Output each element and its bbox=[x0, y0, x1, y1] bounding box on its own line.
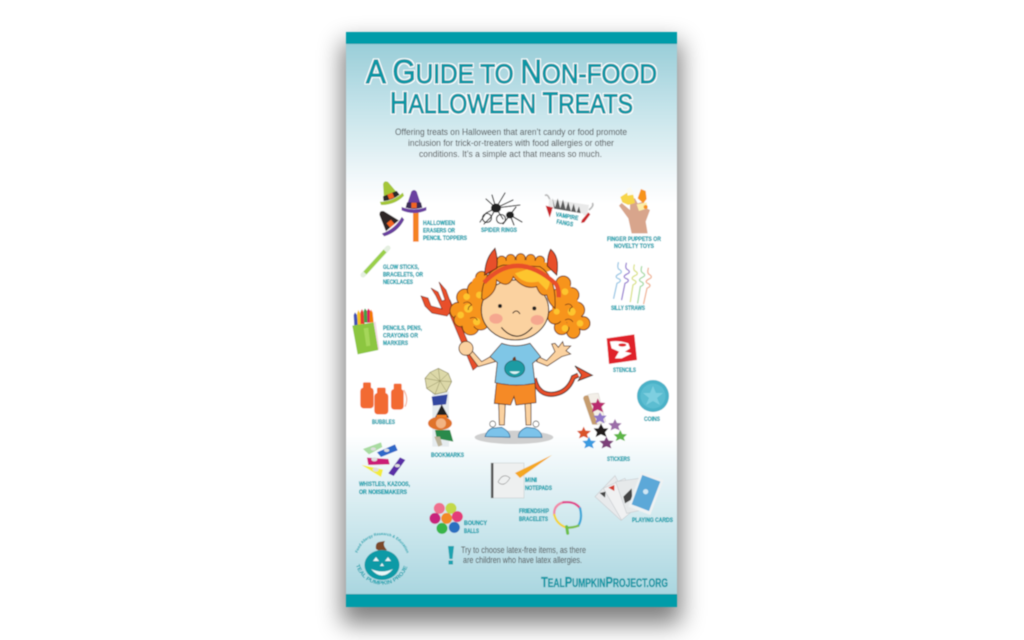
label: glow sticks: BRACELETS, OR bbox=[383, 272, 423, 278]
ground shadow bbox=[475, 431, 553, 444]
title bbox=[366, 53, 657, 120]
label: stickers: STICKERS bbox=[607, 456, 630, 463]
logo: teal pumpkin project bbox=[354, 532, 409, 586]
legs bbox=[499, 403, 505, 425]
intro text bbox=[395, 127, 627, 159]
item: mini notepads bbox=[491, 455, 552, 498]
item: bouncy balls bbox=[429, 503, 488, 535]
icon: coin bbox=[637, 380, 669, 412]
label: spider rings: SPIDER RINGS bbox=[481, 227, 517, 234]
headband and horns bbox=[484, 266, 559, 297]
label: kazoos: OR NOISEMAKERS bbox=[359, 489, 407, 496]
label: halloween erasers bbox=[423, 220, 467, 242]
icon: glow stick bbox=[363, 248, 388, 275]
label: bouncy balls: BALLS bbox=[464, 528, 479, 535]
label: coins: COINS bbox=[644, 416, 660, 423]
hair bbox=[450, 254, 590, 338]
ring text top: Food Allergy Research & Education bbox=[354, 532, 409, 554]
item: bubbles bbox=[360, 382, 407, 426]
nose and mouth bbox=[513, 311, 520, 314]
icon: stencil bbox=[607, 334, 637, 364]
label: playing cards: PLAYING CARDS bbox=[632, 517, 673, 524]
latex note: are children who have latex allergies. bbox=[463, 555, 582, 565]
icon: cards bbox=[595, 472, 664, 520]
illustration: child in devil costume bbox=[421, 248, 592, 444]
item: stencils bbox=[607, 334, 637, 374]
eyes bbox=[498, 304, 502, 308]
title: HALLOWEEN TREATS bbox=[390, 87, 633, 120]
icon: sticker roll and stars bbox=[577, 393, 627, 448]
panel shadow bbox=[342, 42, 681, 624]
label: bouncy balls: BOUNCY bbox=[464, 520, 488, 527]
label: friendship bracelets bbox=[519, 508, 549, 523]
latex note bbox=[461, 545, 586, 565]
icon: witch hats bbox=[371, 177, 426, 242]
icon: bubble bottles bbox=[360, 382, 407, 414]
pumpkin bbox=[376, 541, 387, 552]
intro text: Offering treats on Halloween that aren’t candy or food promote bbox=[395, 127, 627, 137]
label: mini notepads bbox=[525, 477, 552, 492]
cheeks bbox=[489, 314, 503, 324]
item: vampire fangs bbox=[545, 195, 593, 229]
title: A GUIDE TO NON-FOOD bbox=[366, 53, 657, 90]
left arm bbox=[466, 348, 495, 367]
label: halloween erasers: PENCIL TOPPERS bbox=[423, 235, 467, 242]
poster panel bbox=[345, 31, 678, 608]
label: crayons: PENCILS, PENS, bbox=[383, 325, 422, 332]
icon: kazoos bbox=[362, 442, 405, 477]
icon: finger puppets on hand bbox=[619, 187, 650, 233]
shoes bbox=[485, 427, 510, 437]
latex note: Try to choose latex-free items, as there bbox=[461, 545, 586, 555]
label: crayons: CRAYONS OR bbox=[383, 332, 418, 340]
label: vampire fangs: FANGS bbox=[556, 219, 574, 228]
label: bubbles: BUBBLES bbox=[372, 419, 395, 426]
item: crayons bbox=[352, 308, 422, 354]
label: friendship bracelets: FRIENDSHIP bbox=[519, 508, 549, 515]
intro text: inclusion for trick-or-treaters with food allergies or other bbox=[408, 138, 614, 148]
shirt bbox=[490, 343, 541, 385]
label: mini notepads: NOTEPADS bbox=[525, 485, 552, 492]
hair fringe bbox=[482, 265, 555, 308]
label: friendship bracelets: BRACELETS bbox=[519, 516, 548, 523]
label: bookmarks: BOOKMARKS bbox=[431, 452, 464, 459]
label: crayons bbox=[383, 325, 422, 347]
right arm and hand bbox=[537, 342, 571, 366]
label: crayons: MARKERS bbox=[383, 340, 408, 347]
label: halloween erasers: HALLOWEEN bbox=[423, 220, 455, 227]
label: bouncy balls bbox=[464, 520, 488, 535]
item: spider rings bbox=[480, 193, 522, 234]
trident bbox=[421, 282, 478, 370]
item: stickers bbox=[577, 393, 630, 463]
shirt pumpkin bbox=[505, 360, 525, 377]
icon: straws bbox=[614, 263, 651, 304]
item: coins bbox=[637, 380, 669, 423]
label: stencils: STENCILS bbox=[613, 367, 636, 374]
item: silly straws bbox=[611, 263, 651, 312]
label: mini notepads: MINI bbox=[525, 477, 537, 484]
item: halloween erasers bbox=[371, 177, 467, 242]
label: halloween erasers: ERASERS OR bbox=[423, 228, 455, 234]
intro text: conditions. It’s a simple act that means so much. bbox=[419, 149, 602, 159]
item: bookmarks bbox=[425, 368, 464, 459]
item: playing cards bbox=[595, 472, 673, 524]
bottom band bbox=[346, 594, 677, 607]
face bbox=[481, 280, 549, 340]
label: finger puppets: FINGER PUPPETS OR bbox=[607, 236, 661, 243]
icon: crayon box bbox=[352, 308, 379, 354]
icon: spider rings bbox=[480, 193, 522, 225]
item: kazoos bbox=[359, 442, 410, 496]
tail bbox=[534, 375, 578, 394]
icon: exclamation mark bbox=[448, 546, 454, 564]
item: friendship bracelets bbox=[519, 502, 581, 533]
shorts bbox=[494, 382, 536, 405]
label: vampire fangs bbox=[554, 211, 579, 229]
label: silly straws: SILLY STRAWS bbox=[611, 305, 645, 312]
icon: balls bbox=[429, 503, 463, 534]
top band bbox=[346, 32, 677, 44]
icon: bracelet bbox=[554, 502, 581, 533]
label: glow sticks: GLOW STICKS, bbox=[383, 264, 419, 271]
icon: witch bookmark bbox=[425, 368, 453, 447]
icon: fangs bbox=[545, 195, 593, 228]
item: glow sticks bbox=[363, 248, 423, 286]
icon: notepad and pencil bbox=[491, 455, 552, 498]
label: vampire fangs: VAMPIRE bbox=[555, 211, 579, 222]
label: glow sticks bbox=[383, 264, 423, 286]
label: kazoos bbox=[359, 481, 410, 496]
item: finger puppets bbox=[607, 187, 661, 250]
label: finger puppets: NOVELTY TOYS bbox=[614, 243, 654, 250]
label: glow sticks: NECKLACES bbox=[383, 279, 413, 286]
label: kazoos: WHISTLES, KAZOOS, bbox=[359, 481, 410, 488]
website url: TEALPUMPKINPROJECT.ORG bbox=[541, 574, 668, 591]
ring text bottom: TEAL PUMPKIN PROJECT bbox=[356, 564, 408, 586]
label: finger puppets bbox=[607, 236, 661, 250]
